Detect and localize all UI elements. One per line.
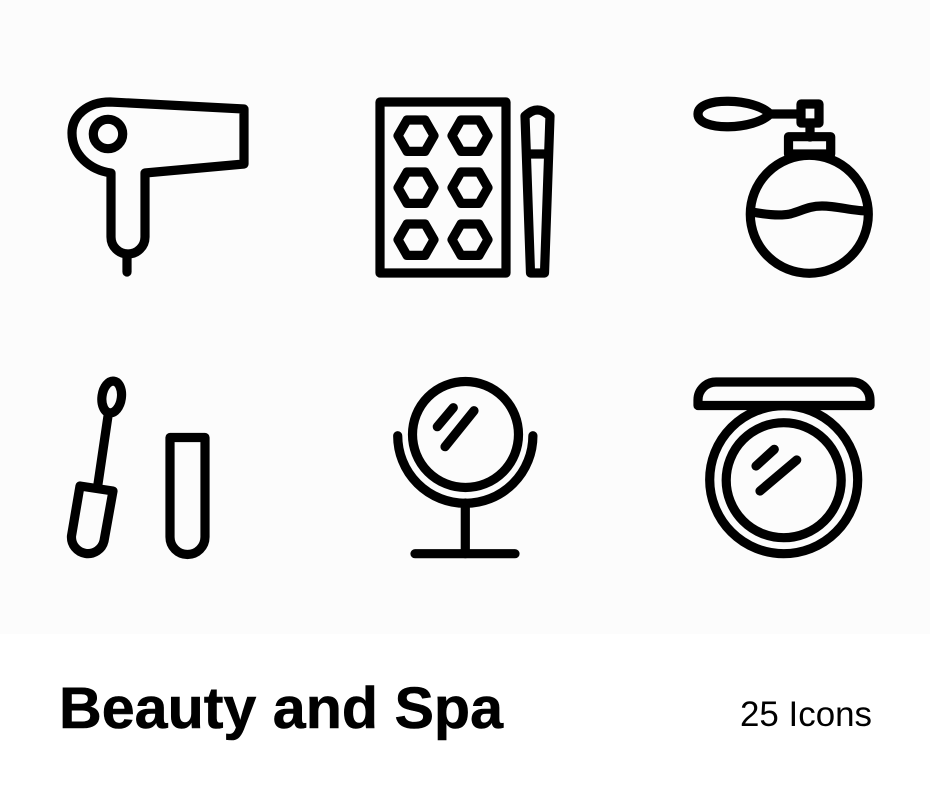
icon: table mirror bbox=[398, 382, 533, 554]
icon: compact mirror bbox=[698, 382, 870, 554]
icon: eyeshadow palette and brush bbox=[380, 102, 550, 273]
title: Beauty and Spa bbox=[59, 676, 504, 741]
icon: hair dryer bbox=[72, 102, 244, 272]
icon: mascara wand and tube bbox=[71, 380, 205, 554]
icon: perfume bottle bbox=[698, 101, 868, 273]
icon count: 25 Icons bbox=[740, 695, 872, 734]
